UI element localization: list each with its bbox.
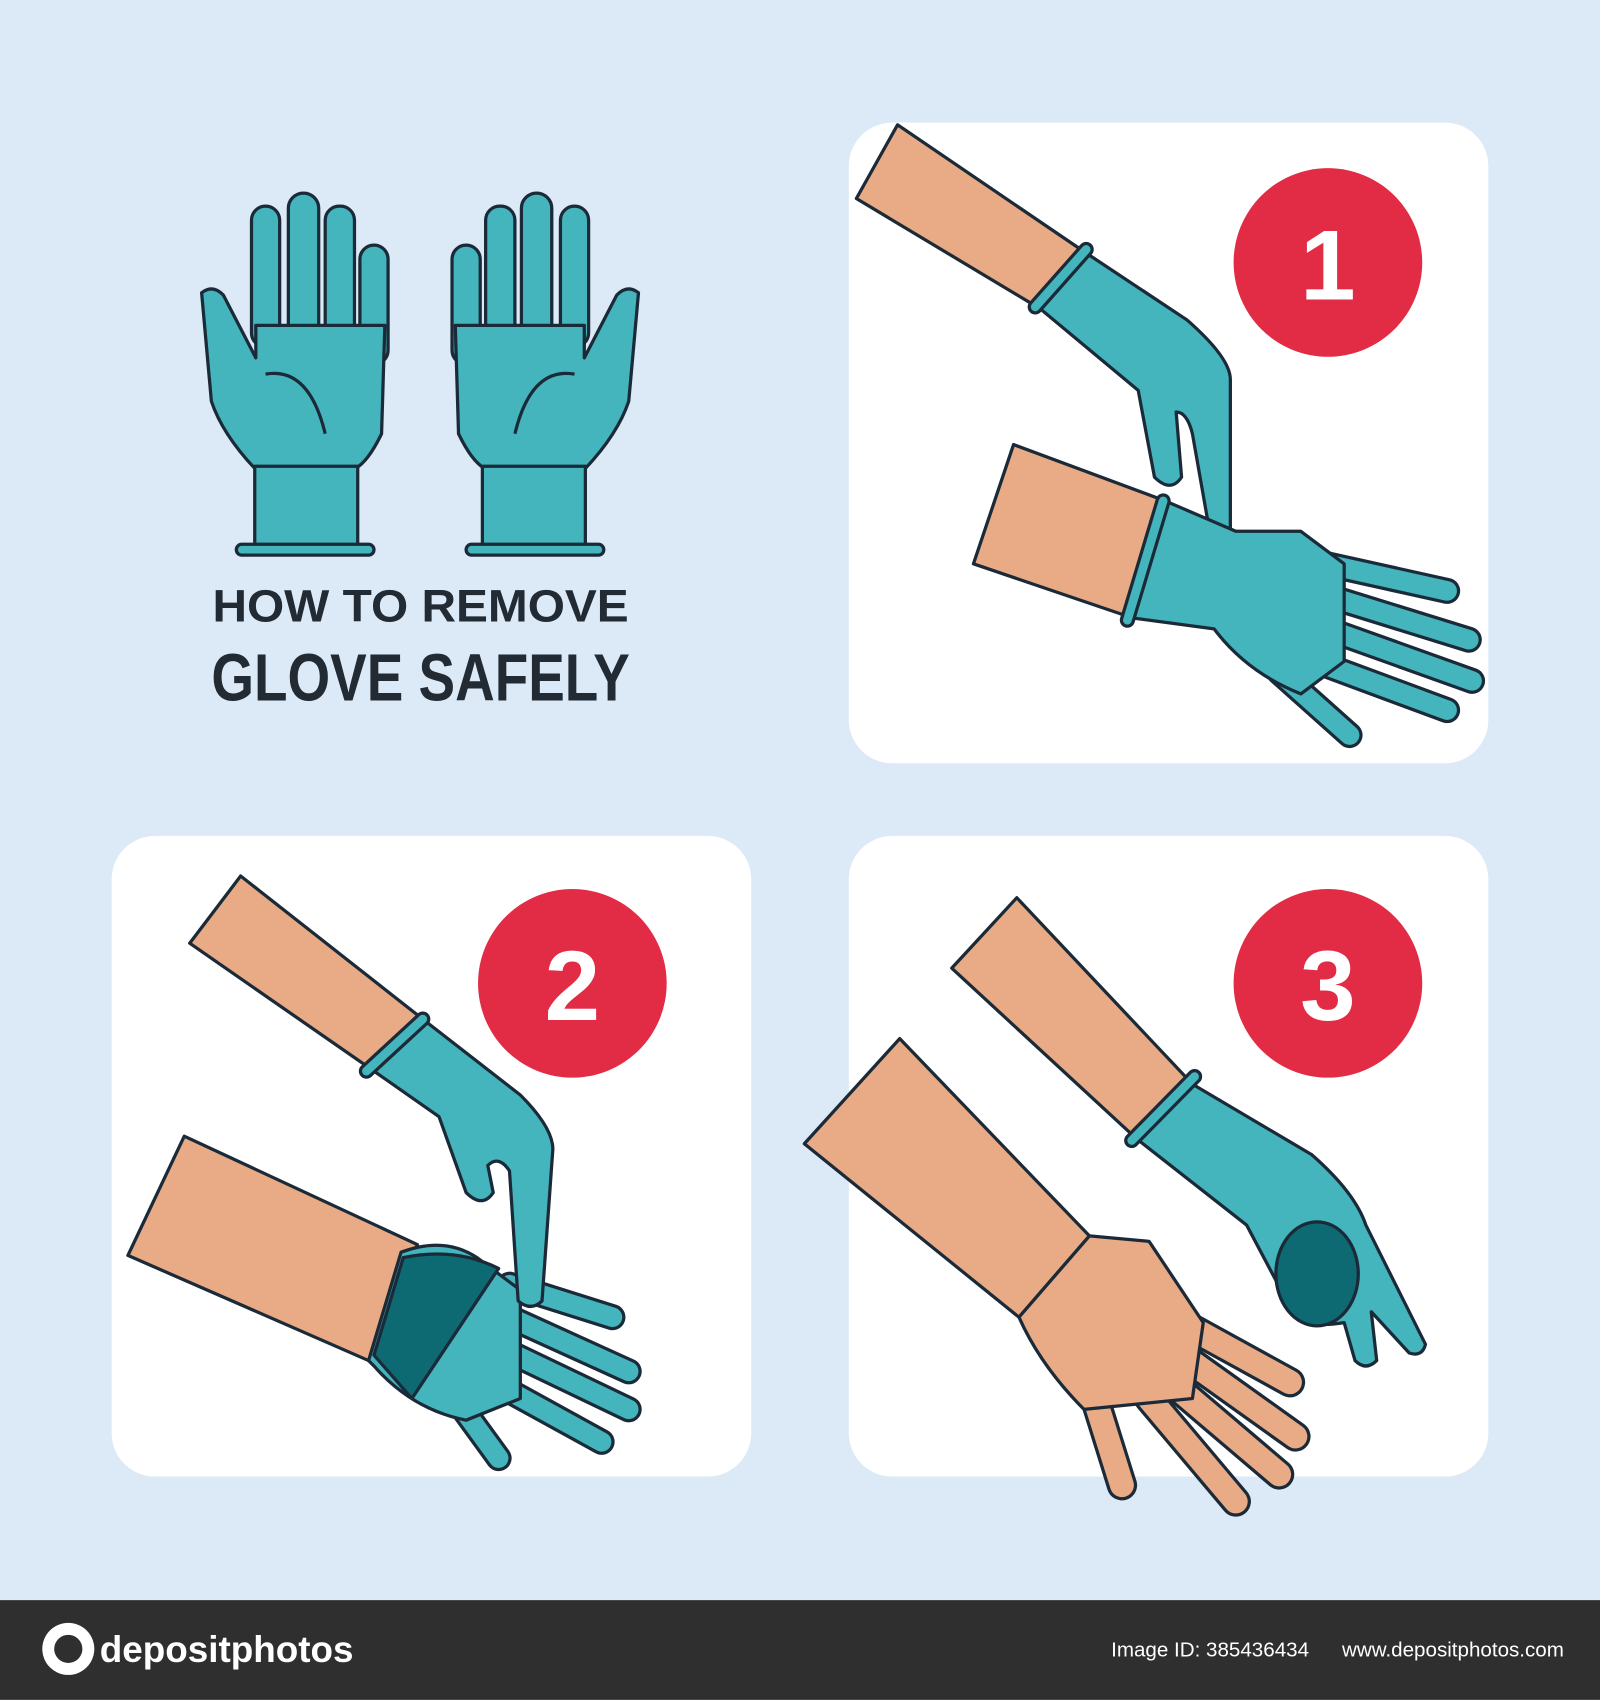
title: GLOVE SAFELY [211, 640, 630, 715]
badge: 2: 2 [545, 931, 600, 1042]
footer bar: depositphotos [100, 1629, 354, 1670]
title [211, 580, 630, 715]
footer bar [0, 1600, 1600, 1700]
badge: 3 [1234, 889, 1422, 1078]
badge: 3: 3 [1300, 931, 1356, 1042]
footer bar: Image ID: 385436434 [1111, 1639, 1309, 1662]
hand: bare hand [804, 1039, 1295, 1501]
icon: pair of gloves [202, 193, 638, 555]
hand: upper arm pulling [856, 125, 1230, 533]
title: HOW TO REMOVE [212, 580, 629, 631]
badge: 2 [478, 889, 667, 1078]
badge: 1: 1 [1300, 210, 1356, 321]
panel: step 1 [849, 123, 1488, 763]
footer bar: www.depositphotos.com [1341, 1639, 1564, 1662]
hand: lower gloved hand [973, 445, 1472, 735]
badge: 1 [1234, 168, 1422, 357]
panel: step 3 [804, 836, 1488, 1501]
panel: step 2 [112, 836, 751, 1477]
hand: upper hand holding removed glove [952, 898, 1425, 1366]
hand: upper arm pulling glove [190, 876, 553, 1306]
hand: lower hand with glove being peeled [128, 1136, 629, 1458]
